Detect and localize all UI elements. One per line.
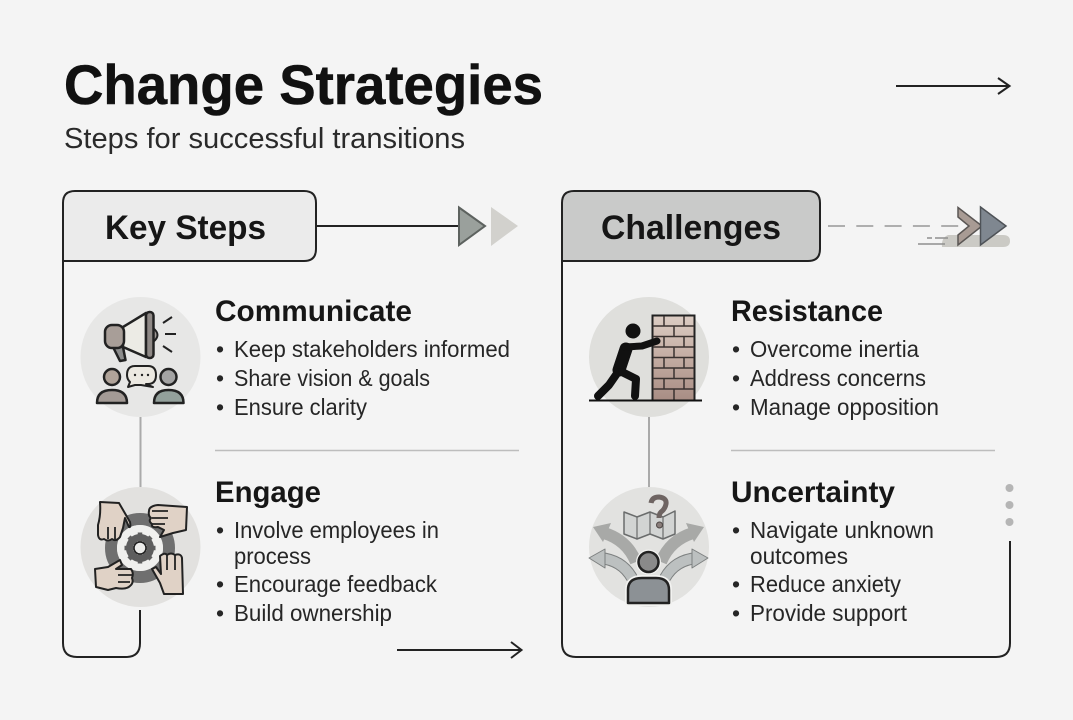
heading: challenges: Challenges (601, 209, 781, 247)
text block: uncertainty: • (732, 600, 740, 626)
arrow: key steps connector (316, 207, 518, 246)
text block: uncertainty: Uncertainty (731, 476, 896, 509)
text block: resistance: Overcome inertia (750, 336, 919, 362)
text block: communicate: • (216, 394, 224, 420)
text block: engage: Encourage feedback (234, 571, 437, 597)
text block: engage (215, 476, 439, 626)
text block: engage: process (234, 543, 311, 569)
panel: challenges (562, 191, 1014, 657)
arrow: challenges connector (828, 207, 1010, 247)
connector: communicate to engage (140, 417, 142, 487)
text block: uncertainty: Provide support (750, 600, 908, 626)
text block: communicate: Ensure clarity (234, 394, 367, 420)
text block: engage: Engage (215, 476, 321, 509)
heading: challenges (562, 191, 820, 261)
icon: person with map and diverging arrows (589, 487, 709, 607)
icon: hands around gear (80, 487, 200, 607)
panel outline: key steps (63, 261, 140, 657)
text block: uncertainty (731, 476, 934, 626)
text block: uncertainty: Reduce anxiety (750, 571, 901, 597)
text block: resistance: Resistance (731, 295, 883, 328)
arrow: top right (896, 78, 1010, 94)
icon: person pushing brick wall (589, 297, 709, 417)
text block: engage: Build ownership (234, 600, 392, 626)
text block: uncertainty: • (732, 571, 740, 597)
text block: communicate (215, 295, 510, 420)
title: Change Strategies (64, 53, 543, 116)
text block: uncertainty: outcomes (750, 543, 848, 569)
text block: communicate: Keep stakeholders informed (234, 336, 510, 362)
text block: uncertainty: • (732, 517, 740, 543)
dots (1006, 484, 1014, 526)
text block: resistance: Manage opposition (750, 394, 939, 420)
text block: communicate: • (216, 365, 224, 391)
arrow: bottom of key steps (397, 642, 522, 658)
heading: key steps: Key Steps (105, 209, 266, 247)
text block: communicate: Share vision & goals (234, 365, 430, 391)
connector: resistance to uncertainty (648, 417, 650, 487)
text block: resistance: Address concerns (750, 365, 926, 391)
text block: communicate: Communicate (215, 295, 412, 328)
panel outline: challenges (562, 261, 1010, 657)
text block: resistance: • (732, 394, 740, 420)
text block: communicate: • (216, 336, 224, 362)
heading: key steps (63, 191, 316, 261)
text block: engage: • (216, 517, 224, 543)
text block: resistance: • (732, 365, 740, 391)
icon: megaphone and people (80, 297, 200, 417)
text block: engage: • (216, 600, 224, 626)
subtitle: Steps for successful transitions (64, 123, 465, 155)
panel: key steps (63, 191, 522, 658)
text block: engage: • (216, 571, 224, 597)
text block: uncertainty: Navigate unknown (750, 517, 934, 543)
text block: resistance: • (732, 336, 740, 362)
text block: resistance (731, 295, 939, 420)
text block: engage: Involve employees in (234, 517, 439, 543)
